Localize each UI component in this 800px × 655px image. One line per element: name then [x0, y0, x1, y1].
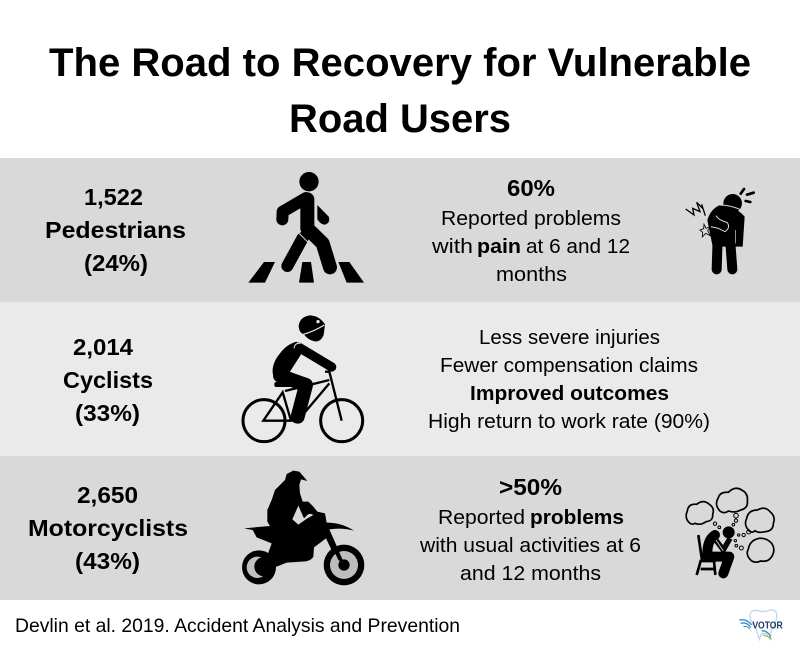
- cyclist count: [63, 334, 153, 426]
- title: Road Users: [289, 97, 511, 141]
- problems statistic: with usual activities at 6: [419, 534, 641, 557]
- problems statistic: [419, 474, 641, 585]
- problems statistic: Reported: [438, 506, 525, 529]
- pain statistic: 60%: [507, 175, 555, 201]
- title: The Road to Recovery for Vulnerable: [49, 41, 751, 85]
- pain statistic: months: [496, 263, 567, 286]
- outcomes text: Fewer compensation claims: [440, 354, 698, 377]
- outcomes text: [428, 326, 710, 433]
- icon: worried person with thought clouds: [686, 488, 774, 575]
- pain statistic: at 6 and 12: [526, 235, 630, 258]
- outcomes text: Improved outcomes: [470, 382, 669, 405]
- problems statistic: and 12 months: [460, 562, 601, 585]
- motorcyclist count: Motorcyclists: [28, 515, 188, 541]
- motorcyclist count: 2,650: [77, 482, 138, 508]
- outcomes text: Less severe injuries: [479, 326, 660, 349]
- panel: pedestrians: [0, 158, 800, 302]
- motorcyclist count: (43%): [75, 548, 140, 574]
- title: [49, 41, 751, 141]
- pedestrian count: Pedestrians: [45, 217, 186, 243]
- pedestrian count: [45, 184, 186, 276]
- logo: VOTOR: [739, 610, 783, 639]
- icon: pedestrian on crossing: [248, 172, 364, 283]
- icon: motorcyclist: [242, 471, 364, 585]
- cyclist count: Cyclists: [63, 367, 153, 393]
- pain statistic: pain: [477, 235, 521, 258]
- outcomes text: High return to work rate (90%): [428, 410, 710, 433]
- cyclist count: (33%): [75, 400, 140, 426]
- pain statistic: Reported problems: [441, 207, 621, 230]
- cyclist count: 2,014: [73, 334, 133, 360]
- pedestrian count: 1,522: [84, 184, 143, 210]
- panel: motorcyclists: [0, 456, 800, 600]
- pain statistic: with: [431, 235, 473, 258]
- citation: Devlin et al. 2019. Accident Analysis and Prevention: [15, 615, 460, 637]
- logo: VOTOR: VOTOR: [752, 621, 783, 632]
- problems statistic: >50%: [499, 474, 562, 500]
- pedestrian count: (24%): [84, 250, 148, 276]
- motorcyclist count: [28, 482, 188, 574]
- icon: person in pain: [686, 189, 754, 269]
- panel: cyclists: [0, 302, 800, 456]
- pain statistic: [431, 175, 630, 286]
- problems statistic: problems: [530, 506, 624, 529]
- icon: cyclist: [243, 315, 363, 442]
